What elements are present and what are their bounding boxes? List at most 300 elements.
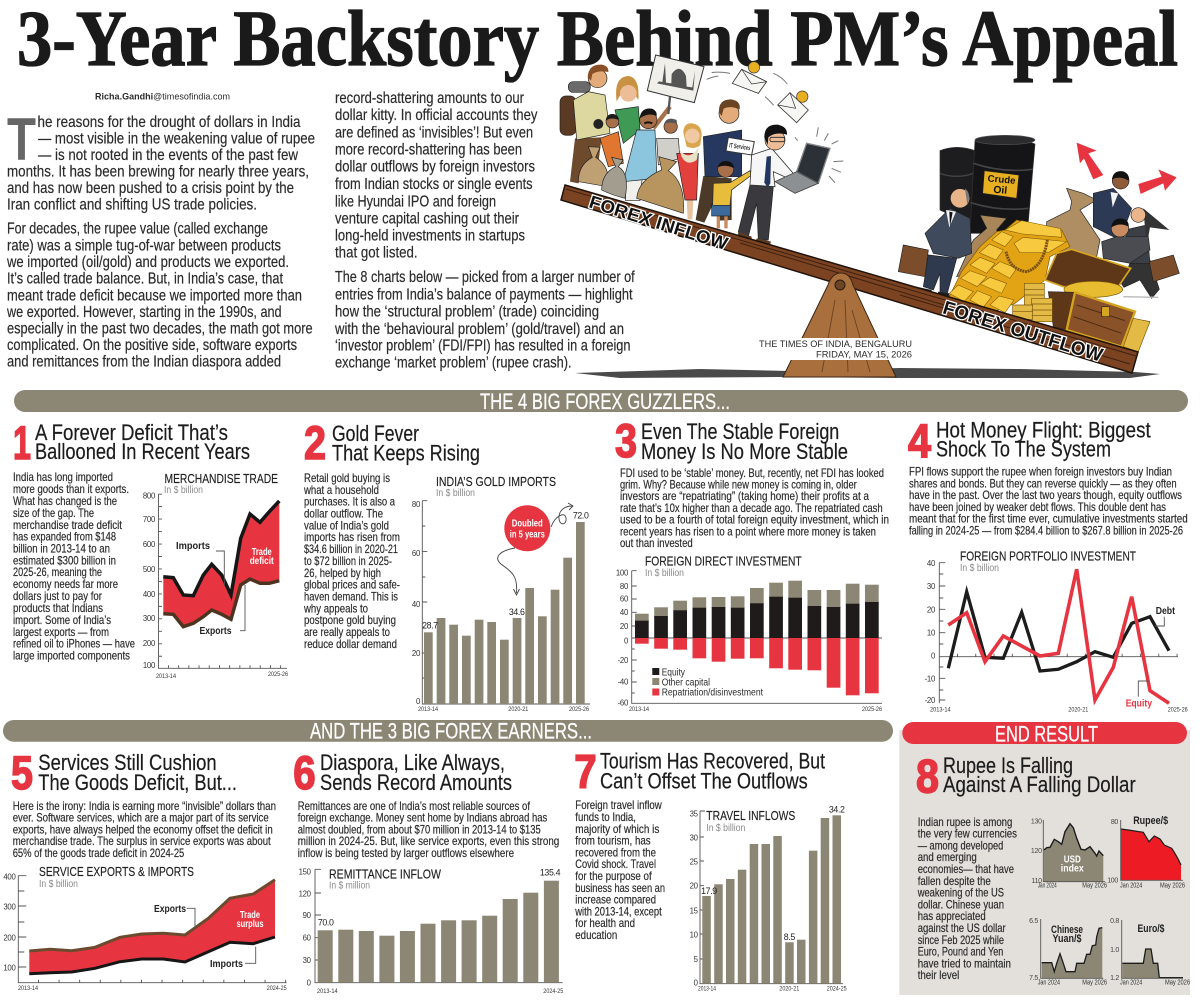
chart: travel bars: TRAVEL INFLOWS xyxy=(706,809,795,823)
chart: merchandise trade area: 700 xyxy=(143,515,156,524)
text block: intro column two: like Hyundai IPO and foreign xyxy=(335,193,496,210)
text block: intro column two: more record-shattering has been xyxy=(335,141,522,158)
woman in green xyxy=(615,76,640,143)
heading 4: Hot Money Flight: Biggest xyxy=(936,417,1151,442)
chart: travel bars: 20 xyxy=(690,882,699,891)
chart: FDI stacked bars: In $ billion xyxy=(645,568,684,579)
chart: remittance bars: 150 xyxy=(299,868,312,877)
chart: merchandise trade area: In $ billion xyxy=(164,485,203,496)
text block 2: 26, helped by high xyxy=(304,567,381,580)
mini chart: euro per dollar: 1.2 xyxy=(1110,975,1119,982)
treasure chest and coins xyxy=(1013,249,1150,352)
red arrows xyxy=(1077,143,1177,194)
numeral 6: 6 xyxy=(293,746,316,799)
chart: merchandise trade area: Exports xyxy=(200,625,232,637)
chart: merchandise trade area: 500 xyxy=(143,565,156,574)
text block 7: increase compared xyxy=(575,894,656,907)
chart: FPI lines: 2013-14 xyxy=(930,707,951,714)
boy in yellow xyxy=(712,161,752,228)
text block 1 xyxy=(13,471,135,662)
text block: intro column one: he reasons for the drought of dollars in India xyxy=(38,114,301,131)
text block: intro column one: — is not rooted in the events of the past few xyxy=(38,147,299,164)
heading 8: Against A Falling Dollar xyxy=(943,772,1136,797)
mini chart: euro per dollar: Euro/$ xyxy=(1138,923,1164,935)
text block 2: haven demand. This is xyxy=(304,590,398,604)
illustration: forex seesaw xyxy=(560,55,1179,378)
text block 8: fallen despite the xyxy=(918,875,991,888)
text block: intro column two xyxy=(334,90,635,372)
heading 3 xyxy=(641,419,848,464)
chart: gold imports bars: 2020-21 xyxy=(508,706,529,713)
oil barrels: Oil xyxy=(993,185,1008,197)
chart: FDI stacked bars: 60 xyxy=(620,594,629,604)
mini chart: USD index: index xyxy=(1061,864,1084,874)
text block 7: majority of which is xyxy=(575,823,659,836)
chart: FPI lines: In $ billion xyxy=(960,563,999,574)
chart: travel bars: 15 xyxy=(690,906,699,915)
mini chart: Chinese yuan per dollar: May 2026 xyxy=(1082,977,1107,986)
chart: travel bars: 30 xyxy=(690,833,699,842)
text block: intro column two: long-held investments in startups xyxy=(335,228,525,245)
chart: travel bars: 25 xyxy=(690,857,699,866)
text block 3 xyxy=(620,467,889,550)
text block 1: 2025-26, meaning the xyxy=(13,566,102,579)
text block 8: their level xyxy=(918,969,959,982)
text block: intro column one: and remittances from the Indian diaspora added xyxy=(7,354,281,371)
chart: merchandise trade area: deficit xyxy=(250,556,274,567)
chart: services area: 2013-14 xyxy=(18,985,38,992)
heading 6: Diaspora, Like Always, xyxy=(320,750,505,775)
bag behind gold xyxy=(957,215,1010,277)
chart: FDI stacked bars: -60 xyxy=(618,698,629,708)
text block: intro column two: ‘investor problem’ (FDI/FPI) has resulted in a foreign xyxy=(335,338,630,355)
text block 8 xyxy=(917,816,1017,982)
heading 2 xyxy=(332,421,480,466)
panel 8: end result xyxy=(899,722,1190,995)
chart: services area: Trade xyxy=(240,910,260,921)
byline: Richa.Gandhi@timesofindia.com xyxy=(95,92,230,102)
text block 8: economies— that have xyxy=(918,863,1014,876)
mini chart: Chinese yuan per dollar xyxy=(1029,918,1107,986)
heading 3: Even The Stable Foreign xyxy=(641,419,839,444)
text block 7: recovered from the xyxy=(575,846,656,859)
arrow to 2025-26 bar xyxy=(551,503,573,527)
heading 7: Tourism Has Recovered, But xyxy=(600,748,825,773)
text block 2: Retail gold buying is xyxy=(304,472,390,485)
gold bars and jewellery xyxy=(948,220,1070,313)
text block 2: postpone gold buying xyxy=(304,614,396,627)
heading 7 xyxy=(600,748,825,793)
mini chart: USD index: Jan 2024 xyxy=(1038,880,1057,889)
ground shadow xyxy=(575,368,1160,378)
chart: remittance bars: 135.4 xyxy=(540,868,561,878)
label: forex inflow: FOREX INFLOW xyxy=(587,192,730,254)
chart: services area: 300 xyxy=(3,903,16,912)
text block: intro column one: meant trade deficit because we imported more than xyxy=(7,287,302,304)
text block 2: global prices and safe- xyxy=(304,579,400,592)
text block 8: Euro, Pound and Yen xyxy=(918,946,1003,959)
text block 7: funds to India, xyxy=(575,811,636,824)
panel 7: travel inflows xyxy=(574,745,847,992)
callout: doubled in 5 years: in 5 years xyxy=(510,530,545,540)
chart: FPI lines: 2025-26 xyxy=(1168,707,1188,714)
chart: gold imports bars xyxy=(412,475,590,713)
text block 2: value of India’s gold xyxy=(304,519,389,532)
text block 2 xyxy=(303,472,400,651)
heading 7: Can’t Offset The Outflows xyxy=(600,768,808,793)
section banner: earners xyxy=(3,718,893,743)
girl in orange sari xyxy=(600,114,623,167)
text block 1: India has long imported xyxy=(13,471,113,484)
chart: gold imports bars: 2013-14 xyxy=(418,706,438,713)
chart: travel bars: 10 xyxy=(690,930,699,939)
text block 3: rate that’s 10x higher than a decade ago. The repatriated cash xyxy=(620,502,883,515)
chart: gold imports bars: INDIA’S GOLD IMPORTS xyxy=(436,475,556,489)
text block 7: business has seen an xyxy=(575,882,665,895)
mini chart: Chinese yuan per dollar: Jan 2024 xyxy=(1038,977,1060,986)
section banner: end result xyxy=(902,722,1187,747)
text block: intro column two: exchange ‘market problem’ (rupee crash). xyxy=(335,355,572,372)
text block: intro column one: — most visible in the weakening value of rupee xyxy=(38,130,315,148)
mini chart: rupee per dollar: 100 xyxy=(1107,878,1118,884)
chart: FPI lines: -10 xyxy=(925,674,936,683)
numeral 5: 5 xyxy=(11,746,33,799)
oil barrels xyxy=(940,135,1035,233)
chart: services area xyxy=(3,865,287,992)
mini chart: euro per dollar: May 2026 xyxy=(1165,977,1190,986)
chart: merchandise trade area: 600 xyxy=(143,540,156,549)
chart: FDI stacked bars: 20 xyxy=(620,622,629,631)
mini chart: Chinese yuan per dollar: 6.5 xyxy=(1029,918,1038,925)
text block 8: and emerging xyxy=(918,851,977,864)
oil barrels: Crude xyxy=(987,173,1017,187)
text block: intro column two: dollar outflows by foreign investors xyxy=(335,159,535,176)
text block 8: dollar. Chinese yuan xyxy=(918,898,1004,911)
chart: merchandise trade area: Imports xyxy=(176,540,210,552)
panel background xyxy=(899,730,1190,995)
text block 3: FDI used to be ‘stable’ money. But, recently, net FDI has looked xyxy=(620,467,884,480)
chart: merchandise trade area: Trade xyxy=(252,547,272,558)
mini chart: euro per dollar: Jan 2024 xyxy=(1120,977,1142,986)
numeral 3: 3 xyxy=(615,414,637,467)
mini chart: rupee per dollar: Rupee/$ xyxy=(1133,815,1168,827)
chart: remittance bars: 0 xyxy=(307,978,312,987)
text block: intro column one: and has now been pushed to a crisis point by the xyxy=(7,180,294,197)
heading 1: A Forever Deficit That’s xyxy=(35,420,228,445)
heading 4 xyxy=(936,417,1151,462)
heading 1 xyxy=(35,420,250,464)
chart: FPI lines xyxy=(925,550,1188,714)
chart: services area: 2024-25 xyxy=(267,985,287,992)
chart: gold imports bars: 40 xyxy=(412,600,421,609)
chart: FDI stacked bars: -20 xyxy=(618,656,629,665)
chart: services area: Exports xyxy=(154,903,186,915)
text block: intro column two: venture capital cashing out their xyxy=(335,210,519,227)
mini chart: euro per dollar: 1.0 xyxy=(1110,947,1119,954)
chart: travel bars: In $ billion xyxy=(706,823,745,834)
text block 2: $34.6 billion in 2020-21 xyxy=(304,543,398,556)
businessman with briefcase xyxy=(898,188,972,297)
section banner: earners: AND THE 3 BIG FOREX EARNERS... xyxy=(310,718,592,743)
text block 7: with 2013-14, except xyxy=(574,905,662,918)
mini chart: euro per dollar xyxy=(1110,918,1190,986)
text block 1: refined oil to iPhones — have xyxy=(13,638,135,650)
chart: merchandise trade area: 2013-14 xyxy=(156,673,176,680)
chart: FPI lines: 20 xyxy=(927,605,936,614)
text block 1: economy needs far more xyxy=(13,578,118,591)
section banner: guzzlers xyxy=(14,389,1188,414)
heading 1: Ballooned In Recent Years xyxy=(35,439,250,464)
text block 5: ever. Software services, which are a major part of its service xyxy=(13,812,269,825)
heading 5: Services Still Cushion xyxy=(38,750,217,775)
chart: gold imports bars: 20 xyxy=(412,649,421,658)
text block 5: merchandise trade. The surplus in service exports was about xyxy=(13,835,271,848)
chart: remittance bars xyxy=(299,867,564,995)
heading 8 xyxy=(943,753,1136,797)
text block 8: Indian rupee is among xyxy=(918,816,1012,829)
text block 6 xyxy=(298,800,559,860)
chart: remittance bars: 60 xyxy=(303,934,312,943)
heading 6: Sends Record Amounts xyxy=(320,770,512,795)
seesaw plank xyxy=(561,185,1138,373)
drop cap: T xyxy=(7,106,36,173)
heading 2: That Keeps Rising xyxy=(332,441,480,466)
other capital bars xyxy=(635,581,879,622)
text block 1: has expanded from $148 xyxy=(13,530,116,544)
chart: services area: Imports xyxy=(210,958,243,970)
mini chart: USD index: 120 xyxy=(1031,848,1042,855)
text block: intro column two: are defined as ‘invisibles’! But even xyxy=(335,124,533,141)
chart: gold imports bars: 0 xyxy=(416,697,421,706)
mini chart: euro per dollar: 0.8 xyxy=(1110,918,1119,925)
heading 3: Money Is No More Stable xyxy=(641,439,848,464)
text block: intro column one: we exported. However, starting in the 1990s, and xyxy=(6,304,282,321)
numeral 1: 1 xyxy=(13,416,31,469)
text block 1: products that Indians xyxy=(13,602,103,615)
text block 1: billion in 2013-14 to an xyxy=(13,542,110,556)
text block: intro column one: complicated. On the positive side, software exports xyxy=(7,337,297,354)
chart: gold imports bars: 2025-26 xyxy=(569,706,589,713)
text block 3: investors are “repatriating” (taking home) their profits at a xyxy=(620,490,869,503)
heading 8: Rupee Is Falling xyxy=(943,753,1073,778)
legend xyxy=(652,667,763,699)
text block 8: against the US dollar xyxy=(918,922,1006,935)
text block: intro column one: It’s called trade balance. But, in India’s case, that xyxy=(7,271,284,288)
chart: remittance bars: 2013-14 xyxy=(317,988,338,995)
text block 8: have tried to maintain xyxy=(918,957,1011,970)
chart: travel bars xyxy=(690,805,847,992)
text block 5: 65% of the goods trade deficit in 2024-25 xyxy=(13,847,185,860)
text block 7: for the purpose of xyxy=(575,870,652,883)
chart: gold imports bars: 34.6 xyxy=(509,607,525,617)
barrels and forex outflow items xyxy=(898,135,1179,352)
dateline: FRIDAY, MAY 15, 2026 xyxy=(816,350,912,360)
chart: merchandise trade area: 2025-26 xyxy=(268,671,288,678)
text block 1: dollars just to pay for xyxy=(13,590,102,603)
text block 5: exports, have always helped the economy offset the deficit in xyxy=(13,823,273,836)
mini chart: Chinese yuan per dollar: Yuan/$ xyxy=(1052,933,1082,945)
text block 8: — among developed xyxy=(918,839,1003,852)
text block 3: recent years has risen to a point where more money is taken xyxy=(620,526,876,538)
text block 6: Remittances are one of India’s most reliable sources of xyxy=(298,800,531,813)
text block 5 xyxy=(13,800,276,860)
big money bag xyxy=(1047,188,1100,257)
chart: FPI lines: FOREIGN PORTFOLIO INVESTMENT xyxy=(960,550,1136,564)
chart: remittance bars: 70.0 xyxy=(318,918,334,928)
chart: remittance bars: 120 xyxy=(299,889,312,898)
text block: intro column two: that got listed. xyxy=(335,245,418,262)
chart: services area: 400 xyxy=(3,873,16,882)
chart: merchandise trade area xyxy=(143,472,288,680)
text block 1: largest exports — from xyxy=(13,626,109,639)
text block 2: reduce dollar demand xyxy=(304,638,397,651)
text block: intro column one: rate) was a simple tug-of-war between products xyxy=(7,237,281,254)
text block 1: What has changed is the xyxy=(13,495,117,508)
chart: FDI stacked bars: 100 xyxy=(616,568,629,578)
text block 2: purchases. It is also a xyxy=(304,496,395,509)
text block: intro column two: record-shattering amounts to our xyxy=(335,90,524,107)
text block: intro column one: Iran conflict and shifting US trade policies. xyxy=(7,196,257,214)
text block 1: more goods than it exports. xyxy=(13,483,129,496)
legend: Other capital xyxy=(662,677,710,688)
text block 3: out than invested xyxy=(620,537,693,550)
callout: doubled in 5 years: Doubled xyxy=(512,518,543,530)
chart: merchandise trade area: 400 xyxy=(143,590,156,599)
text block: intro column one: For decades, the rupee value (called exchange xyxy=(7,221,268,238)
text block 8: weakening of the US xyxy=(917,887,1004,900)
text block 1: size of the gap. The xyxy=(13,507,94,520)
chart: services area: surplus xyxy=(236,919,264,930)
chart: FPI lines: 10 xyxy=(927,629,936,638)
man in blue kurta xyxy=(623,107,670,201)
chart: FDI stacked bars: 2013-14 xyxy=(629,706,649,713)
chart: FDI stacked bars: FOREIGN DIRECT INVESTMENT xyxy=(645,554,802,568)
callout: doubled in 5 years xyxy=(504,505,550,551)
chart: services area: SERVICE EXPORTS & IMPORTS xyxy=(39,865,194,879)
heading 6 xyxy=(320,750,512,795)
chart: FDI stacked bars: 0 xyxy=(624,636,629,646)
text block 2: to $72 billion in 2025- xyxy=(304,555,392,568)
man with IT services placard xyxy=(696,99,754,223)
numeral 8: 8 xyxy=(916,749,939,802)
text block 6: million in 2024-25. But, like service exports, even this strong xyxy=(298,835,559,848)
money bags on the inflow side xyxy=(578,147,684,213)
mini chart: USD index: 110 xyxy=(1031,878,1042,885)
chart: FPI lines: Debt xyxy=(1156,605,1175,617)
chart: gold imports bars: 72.0 xyxy=(573,510,589,520)
envelopes with rupee coins xyxy=(707,62,808,123)
legend: Repatriation/disinvestment xyxy=(662,688,763,699)
chart: FPI lines: 40 xyxy=(927,559,936,568)
mini chart: rupee per dollar: 80 xyxy=(1111,819,1118,826)
text block 7: for health and xyxy=(575,917,635,930)
fulcrum xyxy=(783,273,896,377)
mini chart: USD index: USD xyxy=(1064,854,1081,865)
chart: gold imports bars: 28.7 xyxy=(422,620,438,630)
text block 4 xyxy=(909,466,1188,538)
panel 1: merchandise trade xyxy=(13,416,288,680)
text block 8: the very few currencies xyxy=(918,828,1017,841)
man with IT services placard: IT Services xyxy=(729,142,751,152)
chart: services area: 200 xyxy=(3,933,16,942)
fleeing investors xyxy=(1093,171,1179,298)
section banner: guzzlers: THE 4 BIG FOREX GUZZLERS... xyxy=(480,389,730,414)
chart: FDI stacked bars: 40 xyxy=(620,608,629,617)
chart: FPI lines: 0 xyxy=(931,652,936,661)
mini chart: USD index: May 2026 xyxy=(1082,880,1107,889)
chart: remittance bars: 30 xyxy=(303,956,312,965)
chart: FDI stacked bars xyxy=(616,554,882,713)
section banner: end result: END RESULT xyxy=(995,722,1098,747)
text block 3: used to be a fourth of total foreign equity investment, which in xyxy=(620,514,889,527)
chart: FPI lines: Equity xyxy=(1126,698,1152,710)
text block 2: are really appeals to xyxy=(304,626,390,639)
text block 1: import. Some of India’s xyxy=(13,614,111,627)
chart: remittance bars: In $ million xyxy=(329,880,370,892)
numeral 4: 4 xyxy=(908,414,931,467)
chart: FDI stacked bars: -40 xyxy=(618,678,629,686)
dateline: THE TIMES OF INDIA, BENGALURU xyxy=(759,339,912,350)
equity bars xyxy=(635,597,879,638)
left group: tourists, diaspora and IT workers xyxy=(560,55,843,245)
text block 7: Covid shock. Travel xyxy=(575,858,656,871)
older man xyxy=(657,119,680,165)
chart: gold imports bars: 60 xyxy=(412,549,421,558)
chart: travel bars: 0 xyxy=(694,978,699,987)
text block: intro column two: with the ‘behavioural problem’ (gold/travel) and an xyxy=(334,321,624,338)
chart: FDI stacked bars: 80 xyxy=(620,582,629,591)
chart: remittance bars: REMITTANCE INFLOW xyxy=(329,867,441,881)
chart: travel bars: 35 xyxy=(690,809,699,818)
text block: intro column one xyxy=(6,106,315,371)
chart: merchandise trade area: 200 xyxy=(143,639,156,648)
panel 6: remittance inflow xyxy=(293,746,564,995)
text block 2: what a household xyxy=(303,484,379,497)
mini chart: USD index xyxy=(1031,818,1107,889)
chart: merchandise trade area: 800 xyxy=(143,492,156,500)
chart: travel bars: 2020-21 xyxy=(779,985,800,992)
panel 4: foreign portfolio investment xyxy=(908,414,1188,714)
text block: intro column two: from Indian stocks or single events xyxy=(335,176,533,193)
chart: travel bars: 34.2 xyxy=(829,805,845,815)
mini chart: Chinese yuan per dollar: Chinese xyxy=(1051,924,1083,936)
heading 2: Gold Fever xyxy=(332,421,419,446)
chart: FPI lines: -20 xyxy=(925,696,936,705)
text block 6: foreign exchange. Money sent home by Indians abroad has xyxy=(298,812,547,825)
text block 7: from tourism, has xyxy=(575,835,651,848)
numeral 7: 7 xyxy=(574,745,597,798)
chart: gold imports bars: 80 xyxy=(412,500,421,509)
text block 2: why appeals to xyxy=(303,602,368,615)
mini chart: rupee per dollar: May 2026 xyxy=(1160,880,1185,889)
chart: services area: 100 xyxy=(3,963,16,972)
programmer with laptop xyxy=(738,125,843,245)
chart: remittance bars: 2024-25 xyxy=(543,988,564,995)
dateline xyxy=(757,338,912,360)
tourist with backpack xyxy=(560,65,610,183)
mini chart: Chinese yuan per dollar: 7.5 xyxy=(1029,975,1038,982)
heading 4: Shock To The System xyxy=(936,437,1111,462)
label: forex outflow: FOREX OUTFLOW xyxy=(940,298,1105,367)
text block: intro column one: months. It has been brewing for nearly three years, xyxy=(7,164,309,180)
text block 8: since Feb 2025 while xyxy=(918,934,1004,947)
text block 6: inflow is being tested by larger outflows elsewhere xyxy=(298,847,514,860)
panel 3: foreign direct investment xyxy=(615,414,889,713)
text block: intro column two: dollar kitty. In official accounts they xyxy=(335,107,538,124)
chart: merchandise trade area: 100 xyxy=(143,661,156,670)
mini chart: rupee per dollar xyxy=(1107,815,1185,889)
text block 1: large imported components xyxy=(13,650,130,662)
